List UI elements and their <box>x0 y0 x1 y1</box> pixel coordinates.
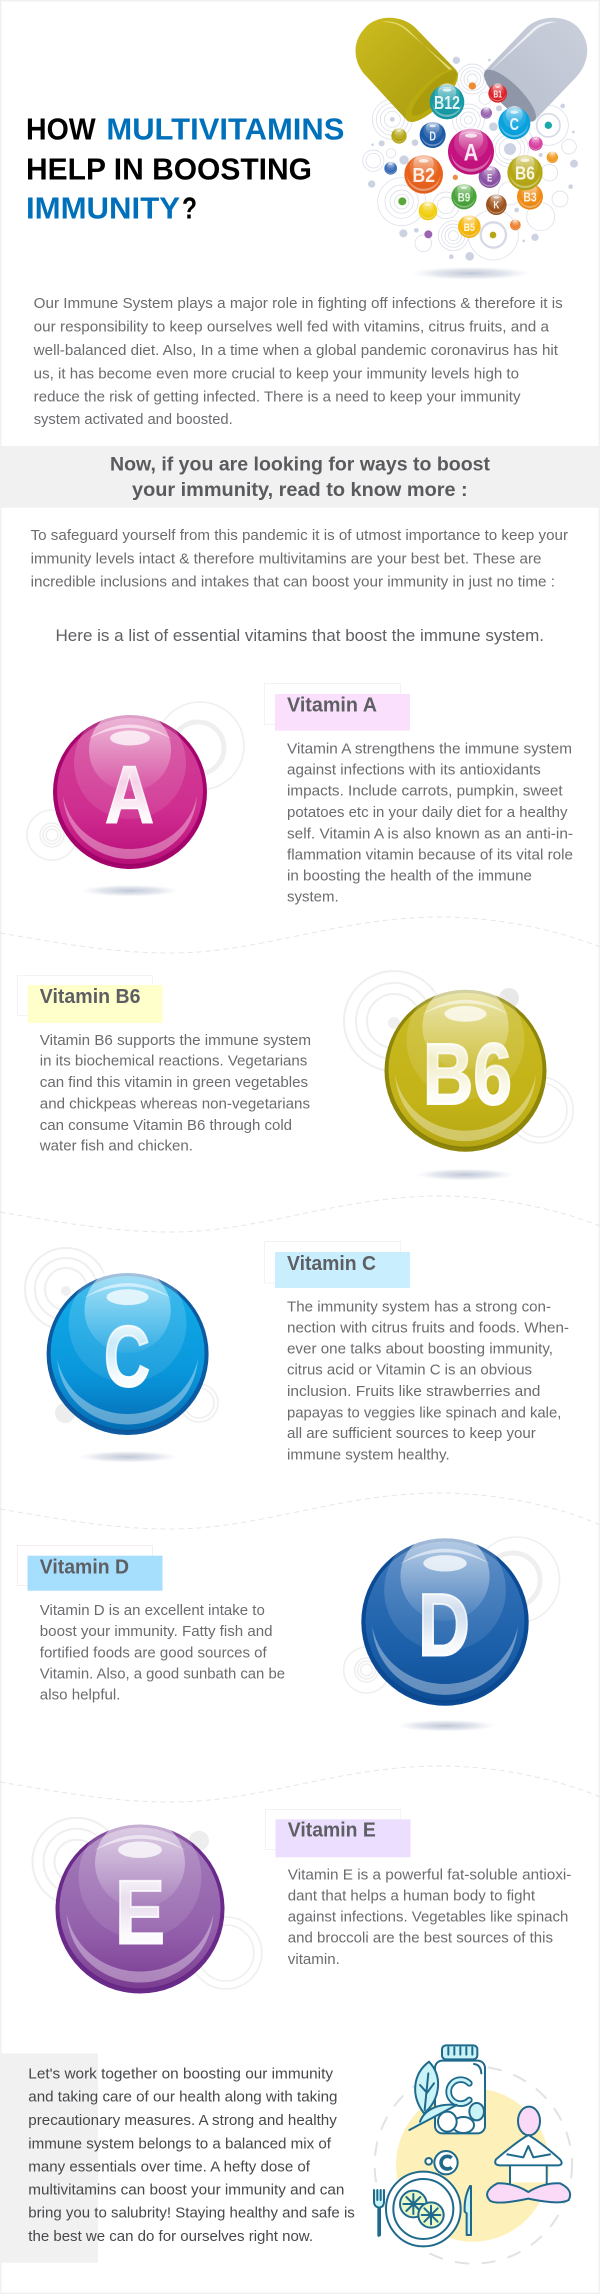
title: HOW <box>26 111 96 146</box>
sphere: B5: B5 <box>464 222 475 234</box>
closing text: and taking care of our health along with taking <box>28 2089 338 2106</box>
heading: Vitamin A <box>264 684 410 731</box>
icon: vitamin bottle with leaves <box>409 2045 485 2133</box>
closing text <box>28 2065 355 2245</box>
closing text: bring you to salubrity! Staying healthy and safe is <box>28 2205 355 2222</box>
decorative circles A <box>27 702 244 860</box>
yellow backdrop circle <box>396 2088 549 2242</box>
safeguard paragraph: immunity levels intact & therefore multivitamins are your best bet. These are <box>31 550 541 567</box>
wave divider 2 <box>0 1196 600 1232</box>
text: Vitamin E: dant that helps a human body to fight <box>288 1887 536 1904</box>
text: Vitamin D: Vitamin D is an excellent intake to <box>40 1602 265 1619</box>
dashed ring <box>375 2066 572 2264</box>
text: Vitamin D: also helpful. <box>40 1686 120 1703</box>
text: Vitamin C: all are sufficient sources to keep your <box>287 1425 536 1442</box>
heading: Vitamin E: Vitamin E <box>288 1820 376 1842</box>
closing text: the best we can do for ourselves right now. <box>28 2228 313 2245</box>
orb: vitamin E: E <box>115 1862 165 1963</box>
title: MULTIVITAMINS <box>106 111 344 146</box>
text: Vitamin B6: in its biochemical reactions. Vegetarians <box>40 1053 307 1070</box>
decorative circles E <box>32 1818 262 1989</box>
icon: plate with citrus and cutlery <box>374 2151 471 2246</box>
orb: vitamin C <box>47 1265 209 1435</box>
text: Vitamin A <box>287 740 573 906</box>
text: Vitamin C: inclusion. Fruits like strawberries and <box>287 1383 540 1400</box>
text: Vitamin A: against infections with its antioxidants <box>287 761 541 778</box>
text: Vitamin C: nection with citrus fruits and foods. When- <box>287 1320 569 1336</box>
section band: read to know more: your immunity, read to know more : <box>132 480 468 501</box>
vitamin B6 section <box>18 971 573 1181</box>
text: Vitamin C <box>287 1298 569 1464</box>
sphere: K <box>486 193 507 215</box>
text: Vitamin C: citrus acid or Vitamin C is an obvious <box>287 1362 532 1379</box>
text: Vitamin B6: can find this vitamin in green vegetables <box>40 1074 308 1091</box>
heading: Vitamin D <box>18 1546 162 1591</box>
text: Vitamin C: The immunity system has a strong con- <box>287 1298 551 1315</box>
decorative circles D <box>344 1537 560 1693</box>
text: Vitamin D: boost your immunity. Fatty fish and <box>40 1623 272 1640</box>
section band: read to know more: Now, if you are looking for ways to boost <box>110 455 491 476</box>
closing text: precautionary measures. A strong and healthy <box>28 2112 337 2129</box>
heading: Vitamin D: Vitamin D <box>40 1556 129 1578</box>
sphere: B6 small <box>507 153 543 190</box>
wave divider 4 <box>0 1766 600 1802</box>
title: ? <box>182 190 197 225</box>
shadow D <box>396 1720 496 1732</box>
text: Vitamin B6: water fish and chicken. <box>39 1138 193 1155</box>
closing text: many essentials over time. A hefty dose of <box>28 2159 311 2176</box>
text: Vitamin A: impacts. Include carrots, pumpkin, sweet <box>287 783 563 800</box>
sphere: B3 <box>517 182 543 210</box>
safeguard paragraph <box>31 527 568 591</box>
sphere: B6 small: B6 <box>515 162 535 183</box>
sphere: C: C <box>510 114 519 134</box>
shadow A <box>80 885 180 897</box>
text: Vitamin A: in boosting the health of the immune <box>287 868 532 885</box>
intro paragraph: our responsibility to keep ourselves well fed with vitamins, citrus fruits, and a <box>34 319 550 336</box>
list intro line: Here is a list of essential vitamins that boost the immune system. <box>56 626 544 645</box>
heading: Vitamin E <box>266 1810 410 1857</box>
sphere: B12 <box>430 83 464 119</box>
title <box>26 111 344 225</box>
vitamin A section <box>27 684 573 906</box>
vitamin E section <box>32 1810 571 1994</box>
intro paragraph: us, it has become even more crucial to keep your immunity levels high to <box>34 365 519 382</box>
sphere: C <box>498 106 530 139</box>
decorative circles C <box>25 1248 218 1423</box>
text: Vitamin E: vitamin. <box>288 1951 340 1968</box>
sphere: B9: B9 <box>458 190 471 204</box>
closing panel <box>0 2053 355 2263</box>
intro paragraph: well-balanced diet. Also, In a time when a global pandemic coronavirus has hit <box>33 342 559 359</box>
title: IMMUNITY <box>26 190 180 225</box>
orb: vitamin A: A <box>105 750 154 841</box>
sphere: B2: B2 <box>412 164 435 187</box>
wave divider 3 <box>0 1493 600 1529</box>
shadow under hero <box>411 267 531 280</box>
text: Vitamin A: self. Vitamin A is also known as an anti-in- <box>287 825 573 842</box>
text: Vitamin E <box>288 1866 571 1968</box>
sphere: K: K <box>493 200 500 212</box>
sphere: B12: B12 <box>434 92 460 113</box>
text: Vitamin A: potatoes etc in your daily diet for a healthy <box>287 804 568 821</box>
sphere: E: E <box>487 172 493 184</box>
heading: Vitamin C <box>264 1242 410 1288</box>
icon: meditating person <box>487 2107 570 2203</box>
text: Vitamin A: system. <box>287 889 339 906</box>
text: Vitamin C: immune system healthy. <box>287 1447 450 1464</box>
unlabelled small spheres <box>384 82 558 238</box>
section band: read to know more <box>0 446 600 508</box>
shadow C <box>78 1451 178 1463</box>
sphere: B3: B3 <box>523 191 537 205</box>
text: Vitamin B6 <box>39 1032 311 1155</box>
text: Vitamin A: Vitamin A strengthens the immune system <box>287 740 572 757</box>
orb: vitamin D <box>361 1530 529 1706</box>
text: Vitamin E: Vitamin E is a powerful fat-soluble antioxi- <box>288 1866 571 1883</box>
title: HELP IN BOOSTING <box>26 151 312 186</box>
sphere: A small: A <box>464 140 478 167</box>
text: Vitamin A: flammation vitamin because of its vital role <box>287 846 573 863</box>
sphere: D <box>420 121 446 148</box>
sphere: B1 <box>488 83 507 103</box>
shadow B6 <box>415 1169 515 1181</box>
safeguard paragraph: To safeguard yourself from this pandemic it is of utmost importance to keep your <box>31 527 568 544</box>
text: Vitamin C: papayas to veggies like spinach and kale, <box>287 1404 561 1422</box>
orb: vitamin B6: B6 <box>423 1026 512 1123</box>
text: Vitamin E: and broccoli are the best sources of this <box>288 1930 553 1947</box>
sphere: E <box>479 165 501 188</box>
hero illustration: open capsule with vitamin spheres <box>356 18 587 280</box>
decorative circles B6 <box>344 971 573 1143</box>
sphere: B1: B1 <box>493 89 502 100</box>
text: Vitamin E: against infections. Vegetables like spinach <box>288 1909 568 1926</box>
safeguard paragraph: incredible inclusions and intakes that can boost your immunity in just no time : <box>31 574 555 591</box>
orb: vitamin B6 <box>384 981 546 1152</box>
vitamin D section <box>18 1530 560 1732</box>
closing text: immune system belongs to a balanced mix of <box>28 2135 332 2152</box>
intro paragraph: system activated and boosted. <box>34 411 233 428</box>
closing background block <box>0 2053 98 2263</box>
intro paragraph: Our Immune System plays a major role in fighting off infections & therefore it is <box>34 295 563 312</box>
yellow capsule half <box>356 18 465 129</box>
heading: Vitamin B6: Vitamin B6 <box>40 986 140 1008</box>
vitamin C section <box>25 1242 569 1464</box>
orb: vitamin E <box>56 1816 224 1994</box>
intro paragraph: reduce the risk of getting infected. There is a need to keep your immunity <box>34 389 521 406</box>
text: Vitamin C: ever one talks about boosting immunity, <box>287 1341 553 1358</box>
sphere: B5 <box>458 214 481 238</box>
text: Vitamin B6: and chickpeas whereas non-vegetarians <box>40 1096 310 1113</box>
grey capsule half <box>477 18 587 128</box>
heading: Vitamin A: Vitamin A <box>287 695 377 717</box>
orb: vitamin A <box>53 707 207 869</box>
heading: Vitamin B6 <box>18 976 162 1023</box>
text: Vitamin D <box>40 1602 285 1703</box>
text: Vitamin B6: Vitamin B6 supports the immune system <box>40 1032 311 1049</box>
sphere: B2 <box>404 153 443 194</box>
decorative rings and dots <box>363 57 578 261</box>
intro paragraph <box>33 295 563 428</box>
text: Vitamin D: fortified foods are good sources of <box>40 1644 268 1661</box>
sphere: D: D <box>429 128 436 143</box>
text: Vitamin B6: can consume Vitamin B6 through cold <box>40 1117 292 1134</box>
sphere: A small <box>448 126 494 175</box>
closing text: multivitamins can boost your immunity and can <box>28 2181 344 2198</box>
sphere: B9 <box>451 183 477 209</box>
orb: vitamin D: D <box>418 1575 470 1675</box>
orb: vitamin C: C <box>104 1309 150 1405</box>
text: Vitamin D: Vitamin. Also, a good sunbath can be <box>40 1666 285 1683</box>
health illustration <box>374 2045 572 2264</box>
closing text: Let's work together on boosting our immunity <box>28 2065 334 2082</box>
wave divider 1 <box>0 917 600 953</box>
heading: Vitamin C: Vitamin C <box>287 1253 376 1275</box>
